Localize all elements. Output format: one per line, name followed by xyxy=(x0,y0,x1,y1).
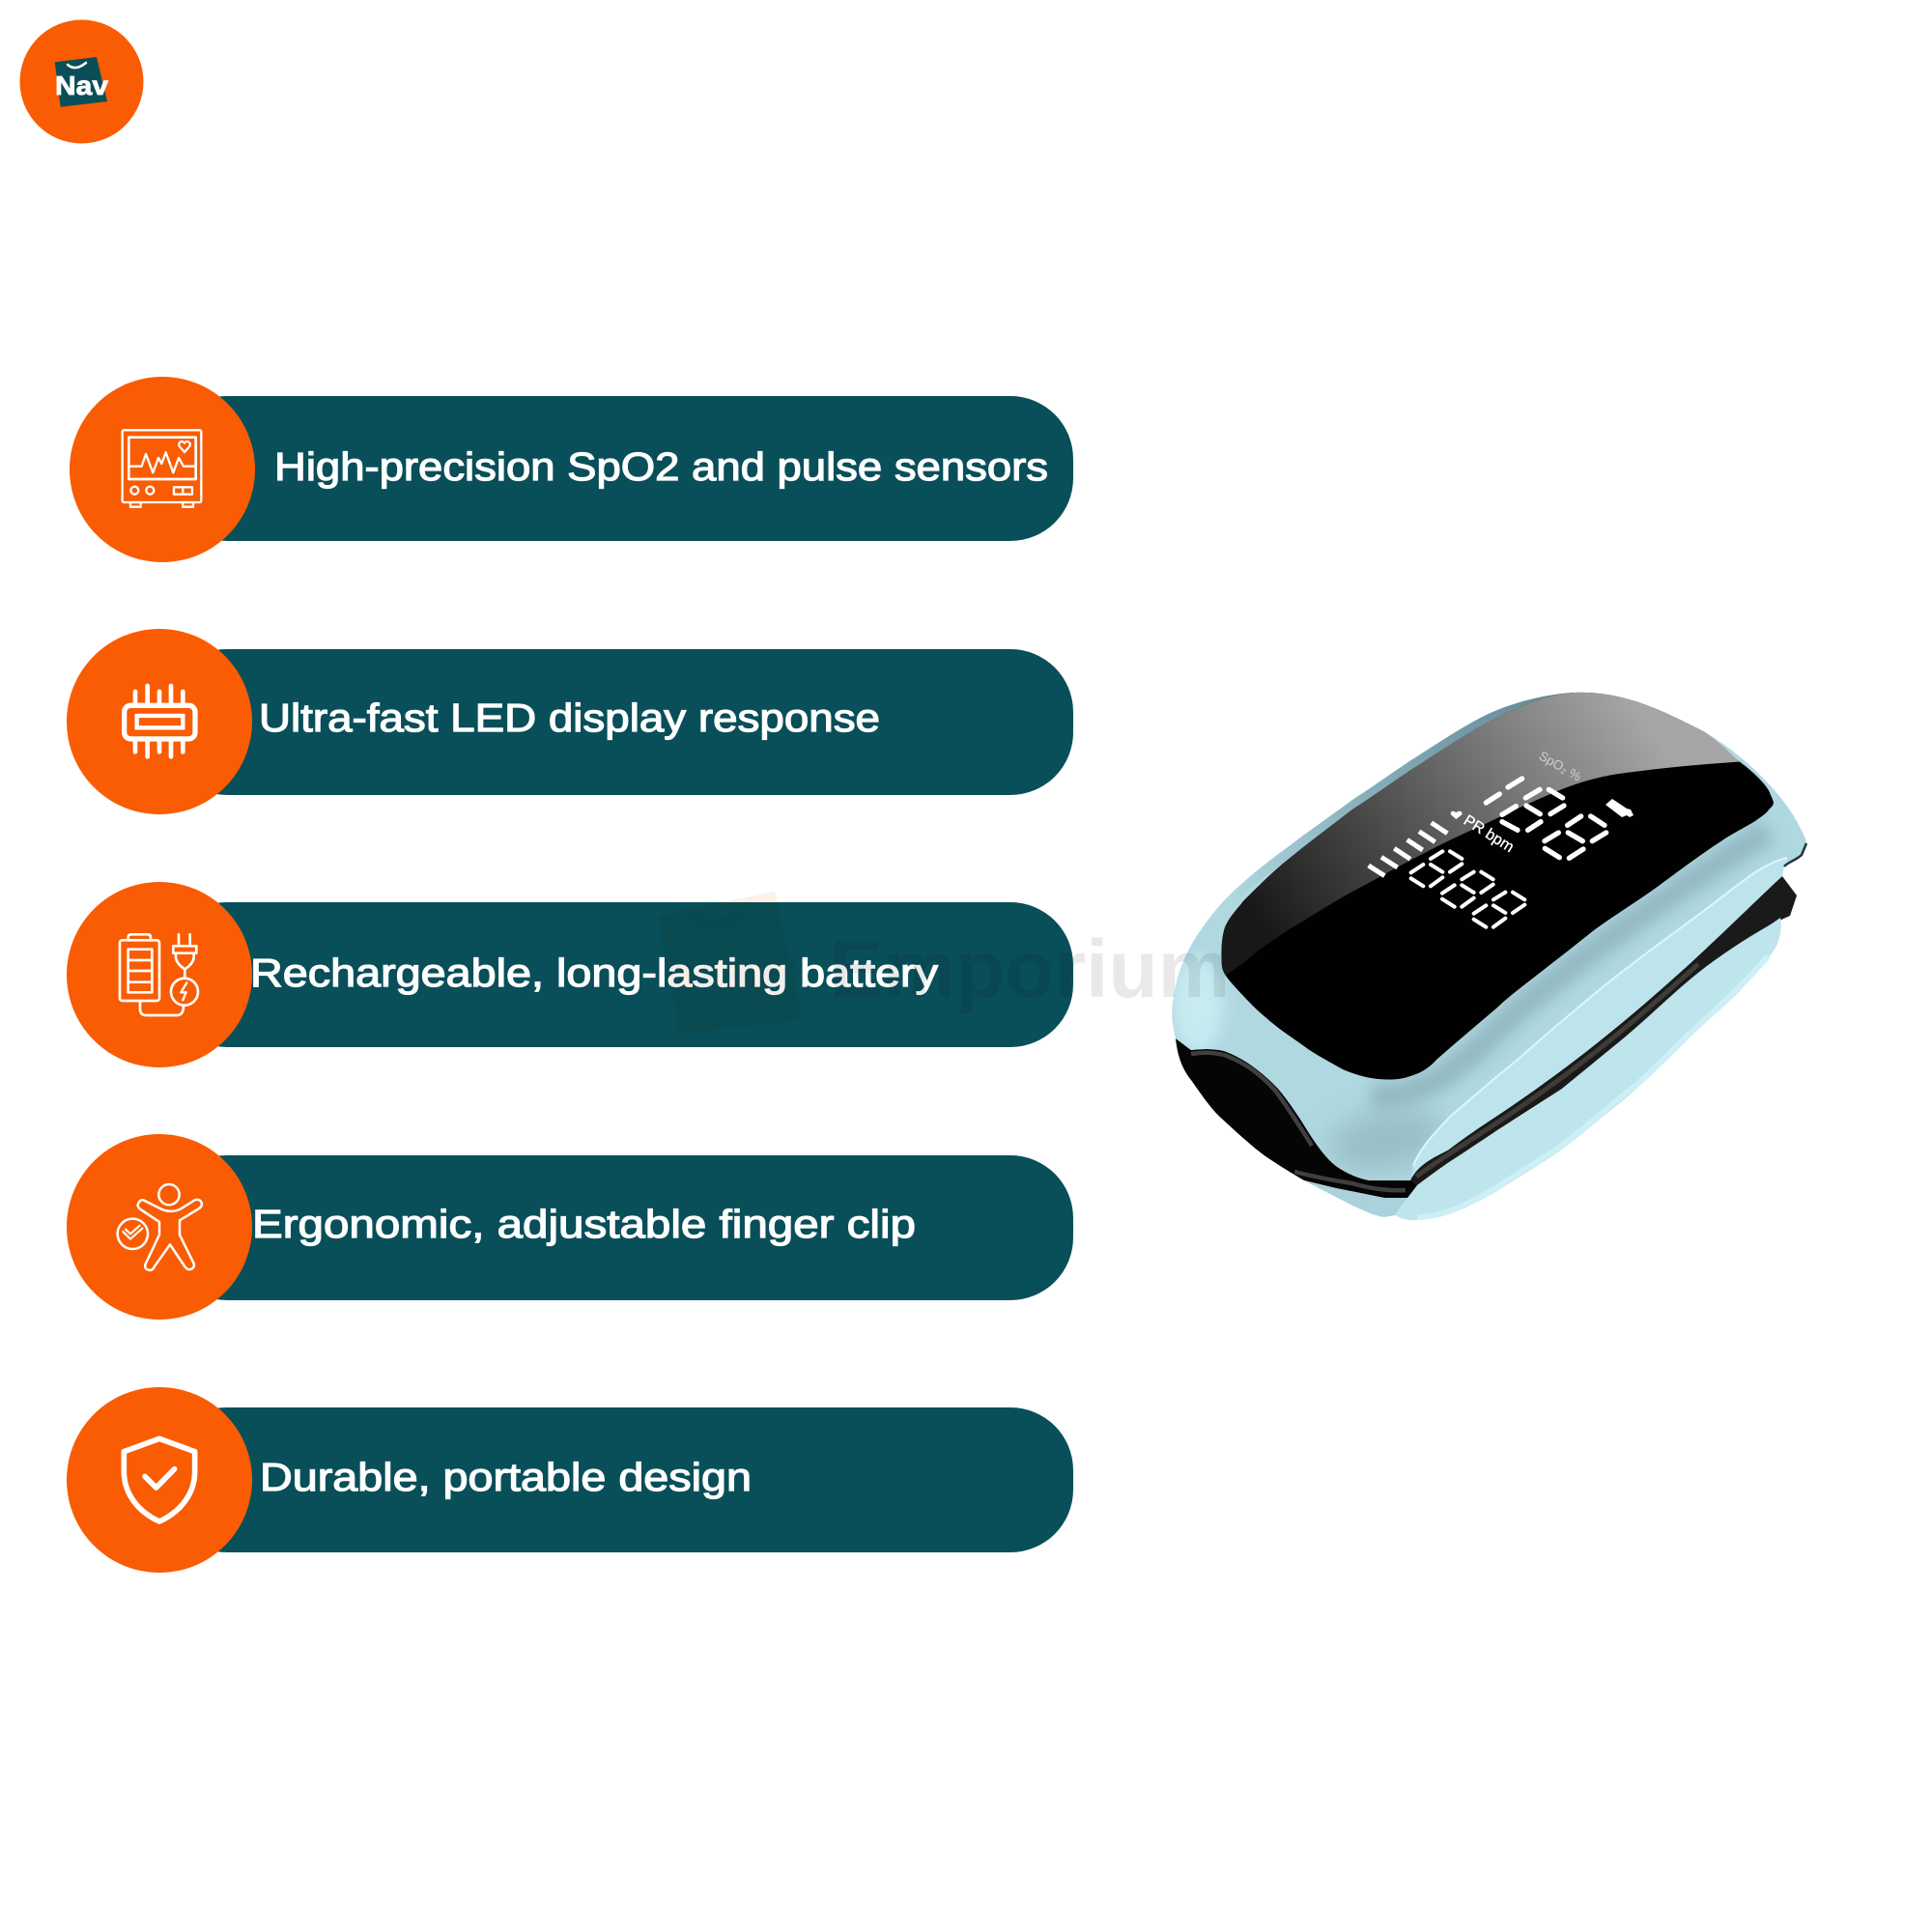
lower shell xyxy=(1396,918,1781,1220)
icon circle 3 xyxy=(67,882,252,1067)
logo badge xyxy=(19,19,143,143)
SpO2 digits xyxy=(1486,779,1564,830)
pulse bars xyxy=(1369,823,1447,876)
upper shell tip xyxy=(1784,843,1806,867)
PR bpm label: PR bpm xyxy=(1461,812,1517,856)
watermark xyxy=(658,892,1230,1034)
upper shell xyxy=(1172,693,1806,1180)
feature row 3 xyxy=(67,882,1073,1067)
PR digit 1 xyxy=(1411,851,1462,886)
icon: battery and plug xyxy=(120,934,198,1015)
seam line xyxy=(1413,858,1787,1166)
watermark smile xyxy=(691,910,742,924)
watermark bag xyxy=(658,892,803,1034)
icon: patient monitor xyxy=(123,430,201,507)
lower shadow patch xyxy=(1326,1107,1443,1178)
feature row 1 xyxy=(70,377,1073,562)
label 4: Ergonomic, adjustable finger clip xyxy=(252,1202,916,1246)
teal rim xyxy=(1235,695,1575,894)
lip between seam and clip xyxy=(1410,858,1787,1188)
shading under screen xyxy=(1372,831,1768,1096)
finger opening xyxy=(1176,1038,1417,1198)
label 1: High-precision SpO2 and pulse sensors xyxy=(274,444,1048,489)
heart glyph xyxy=(1451,811,1463,819)
label 3: Rechargeable, long-lasting battery xyxy=(250,951,939,995)
glass reflection xyxy=(1208,676,1748,978)
icon circle 5 xyxy=(67,1387,252,1573)
icon: shield check xyxy=(124,1438,195,1521)
black screen xyxy=(1221,693,1774,1080)
shell shading xyxy=(1173,695,1787,1188)
left highlight xyxy=(1173,956,1223,1053)
icon circle 1 xyxy=(70,377,255,562)
seam inner stripe xyxy=(1416,964,1698,1177)
product: pulse oximeter xyxy=(1172,676,1806,1220)
base sliver xyxy=(1304,1180,1407,1217)
pill bar 5 xyxy=(164,1407,1073,1552)
SpO2 label: SpO₂ % xyxy=(1536,749,1584,784)
logo badge: Nav xyxy=(55,71,108,100)
feature row 2 xyxy=(67,629,1073,814)
pill bar 1 xyxy=(164,396,1073,541)
feature row 4 xyxy=(67,1134,1073,1320)
icon: LED chip xyxy=(125,686,195,756)
lower shell edge highlight xyxy=(1417,956,1768,1217)
label 2: Ultra-fast LED display response xyxy=(259,696,880,740)
feature row 5 xyxy=(67,1387,1073,1573)
finger opening bands xyxy=(1191,1053,1406,1190)
PR digit 3 xyxy=(1474,893,1524,927)
battery glyph xyxy=(1605,799,1634,817)
icon: ergonomic figure xyxy=(118,1184,202,1270)
watermark text Nav: Nav xyxy=(667,927,797,1013)
label 5: Durable, portable design xyxy=(260,1455,752,1499)
LED display xyxy=(1369,779,1606,927)
pill bar 2 xyxy=(164,649,1073,795)
watermark text Emporium: Emporium xyxy=(829,923,1230,1014)
PR digit 2 xyxy=(1442,872,1493,907)
icon circle 2 xyxy=(67,629,252,814)
pill bar 3 xyxy=(164,902,1073,1047)
icon circle 4 xyxy=(67,1134,252,1320)
second digit xyxy=(1545,816,1606,858)
pill bar 4 xyxy=(164,1155,1073,1300)
clip tail and seam band xyxy=(1391,876,1797,1198)
